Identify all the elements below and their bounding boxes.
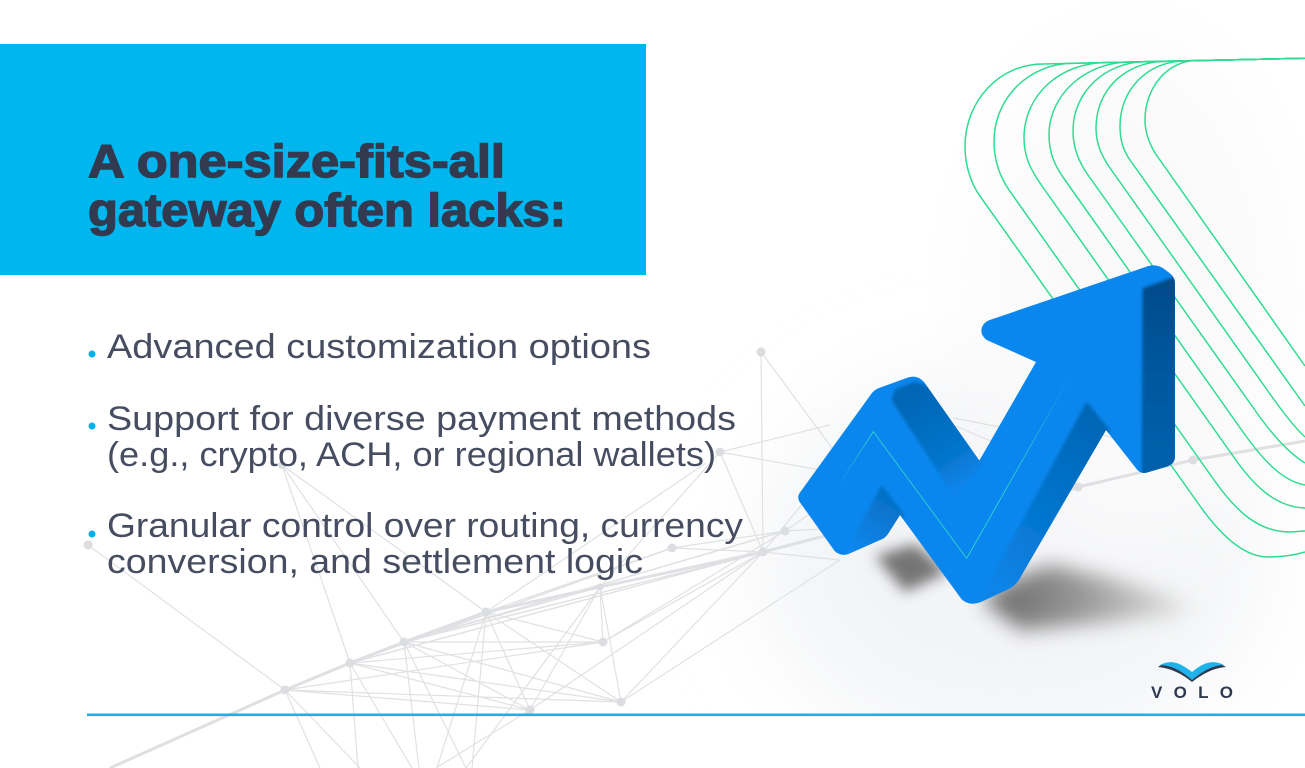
soft grey background glow (786, 399, 1234, 714)
arrow shaded sides (843, 276, 1177, 605)
bullet 3: Granular control over routing, currency (107, 507, 743, 545)
VOLO logo (1151, 662, 1233, 702)
thin cyan line on arrow (837, 377, 1070, 558)
bullet 2: Support for diverse payment methods (107, 400, 736, 438)
heading (88, 135, 566, 236)
heading: A one-size-fits-all (88, 135, 505, 187)
footer rule (87, 714, 1305, 716)
bullet list (88, 328, 743, 581)
3D blue growth arrow (798, 265, 1177, 605)
bullet 3 (88, 507, 743, 581)
network graphic (84, 348, 1305, 768)
bullet 1: Advanced customization options (107, 328, 651, 366)
bullet 2 (88, 400, 736, 474)
green contour lines (965, 58, 1305, 557)
arrow shadow (875, 544, 1195, 630)
heading: gateway often lacks: (88, 184, 566, 236)
title banner (0, 44, 646, 275)
logo wordmark: VOLO (1151, 683, 1233, 702)
bullet 3: conversion, and settlement logic (107, 543, 643, 581)
logo wings (1158, 662, 1226, 682)
bullet 2: (e.g., crypto, ACH, or regional wallets) (107, 436, 716, 474)
arrow front face (798, 265, 1175, 604)
